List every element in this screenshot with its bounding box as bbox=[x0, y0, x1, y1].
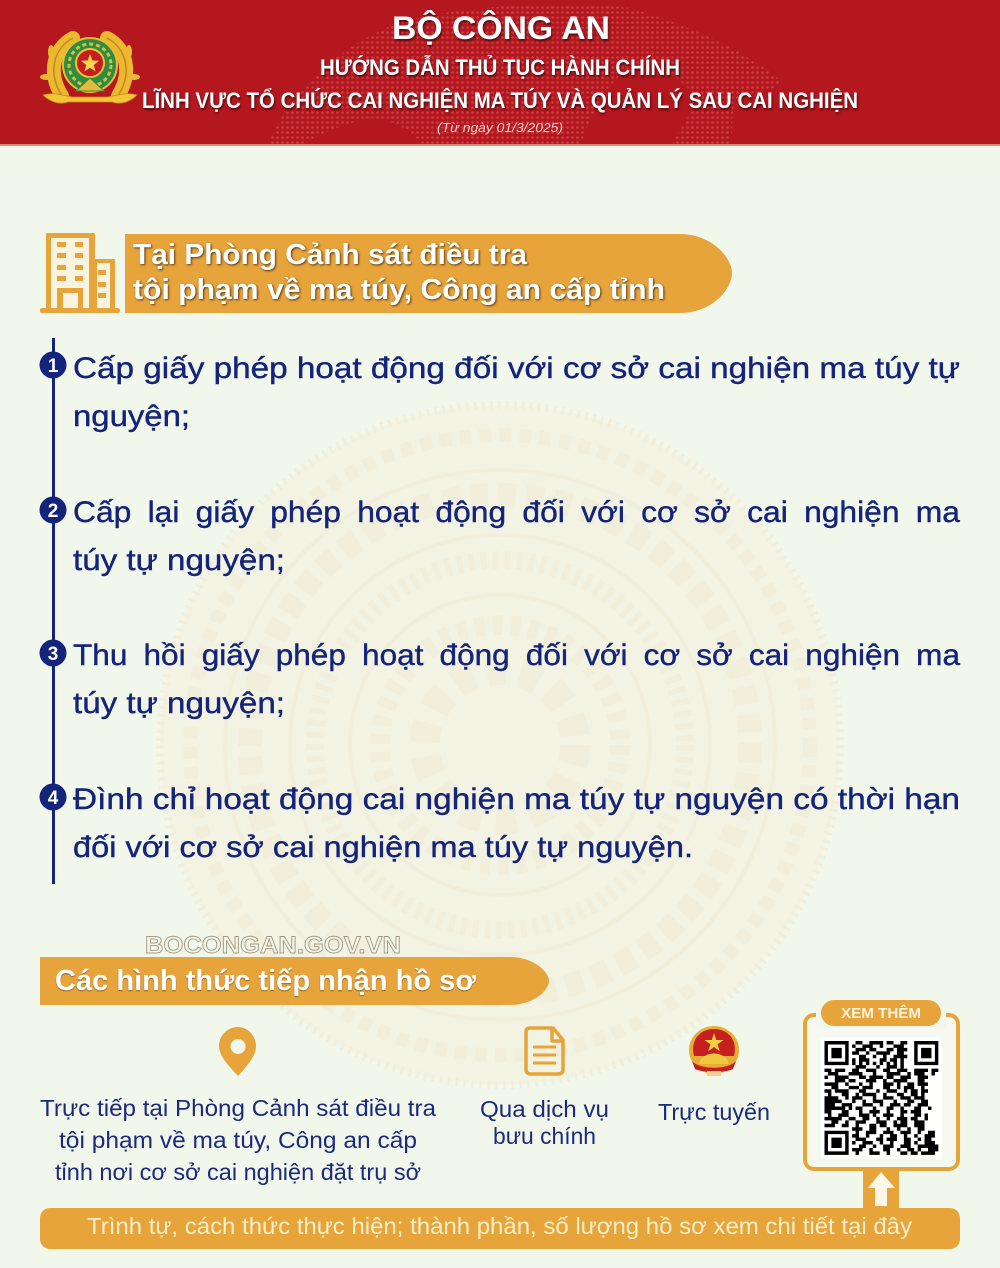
icon: document bbox=[526, 1028, 563, 1074]
item 3: túy tự nguyện; bbox=[73, 687, 285, 720]
item 3 bbox=[40, 639, 960, 720]
item 4 bbox=[40, 783, 960, 864]
subtitle line 1: HƯỚNG DẪN THỦ TỤC HÀNH CHÍNH bbox=[320, 54, 680, 80]
item 2: Cấp lại giấy phép hoạt động đối với cơ sở cai nghiện ma bbox=[73, 496, 960, 529]
text: postal service: bưu chính bbox=[493, 1123, 596, 1149]
arrow pointing to QR bbox=[863, 1171, 899, 1209]
icon: location pin bbox=[219, 1027, 256, 1076]
item 3: 3 bbox=[48, 644, 58, 665]
item 1 bbox=[40, 352, 960, 433]
footer bar: Trình tự, cách thức thực hiện; thành phần, số lượng hồ sơ xem chi tiết tại đây bbox=[87, 1213, 913, 1239]
title: BỘ CÔNG AN bbox=[392, 10, 610, 46]
item 2: 2 bbox=[48, 501, 58, 522]
text: postal service bbox=[480, 1096, 609, 1149]
item 3: Thu hồi giấy phép hoạt động đối với cơ sở cai nghiện ma bbox=[73, 639, 960, 672]
timeline line bbox=[52, 338, 55, 884]
button: see more bbox=[816, 998, 946, 1028]
item 2: túy tự nguyện; bbox=[73, 544, 285, 577]
text: postal service: Qua dịch vụ bbox=[480, 1096, 609, 1122]
text: in person bbox=[40, 1095, 436, 1185]
background watermark: bronze drum bbox=[160, 405, 840, 1085]
header world map dots bbox=[268, 4, 782, 145]
QR panel bbox=[805, 998, 958, 1169]
subtitle line 2: LĨNH VỰC TỔ CHỨC CAI NGHIỆN MA TÚY VÀ QUẢN LÝ SAU CAI NGHIỆN bbox=[142, 88, 858, 113]
item 2 bbox=[40, 496, 960, 577]
item 4: 4 bbox=[48, 788, 59, 809]
QR code bbox=[821, 1038, 942, 1158]
item 1: Cấp giấy phép hoạt động đối với cơ sở cai nghiện ma túy tự bbox=[73, 352, 960, 385]
section heading: submission methods bbox=[40, 957, 549, 1005]
section heading: police department bbox=[125, 234, 732, 313]
text: in person: Trực tiếp tại Phòng Cảnh sát điều tra bbox=[40, 1095, 436, 1121]
section heading: police department: tội phạm về ma túy, Công an cấp tỉnh bbox=[133, 274, 665, 306]
text: in person: tội phạm về ma túy, Công an cấp bbox=[59, 1127, 417, 1153]
section heading: submission methods: Các hình thức tiếp nhận hồ sơ bbox=[55, 965, 476, 997]
header banner bbox=[0, 0, 1000, 146]
item 4: đối với cơ sở cai nghiện ma túy tự nguyện. bbox=[73, 831, 693, 864]
text: online: Trực tuyến bbox=[658, 1099, 770, 1125]
button: see more: XEM THÊM bbox=[841, 1004, 921, 1022]
watermark: website: BOCONGAN.GOV.VN bbox=[145, 932, 401, 959]
icon: office buildings bbox=[40, 233, 120, 313]
effective date: (Từ ngày 01/3/2025) bbox=[437, 120, 563, 135]
section heading: police department: Tại Phòng Cảnh sát điều tra bbox=[133, 239, 528, 271]
icon: national emblem bbox=[689, 1026, 739, 1076]
item 4: Đình chỉ hoạt động cai nghiện ma túy tự nguyện có thời hạn bbox=[73, 783, 960, 816]
item 1: nguyện; bbox=[73, 400, 190, 433]
item 1: 1 bbox=[48, 356, 59, 377]
emblem: police badge bbox=[40, 38, 140, 103]
footer bar bbox=[40, 1208, 960, 1249]
text: in person: tỉnh nơi cơ sở cai nghiện đặt trụ sở bbox=[55, 1159, 421, 1185]
